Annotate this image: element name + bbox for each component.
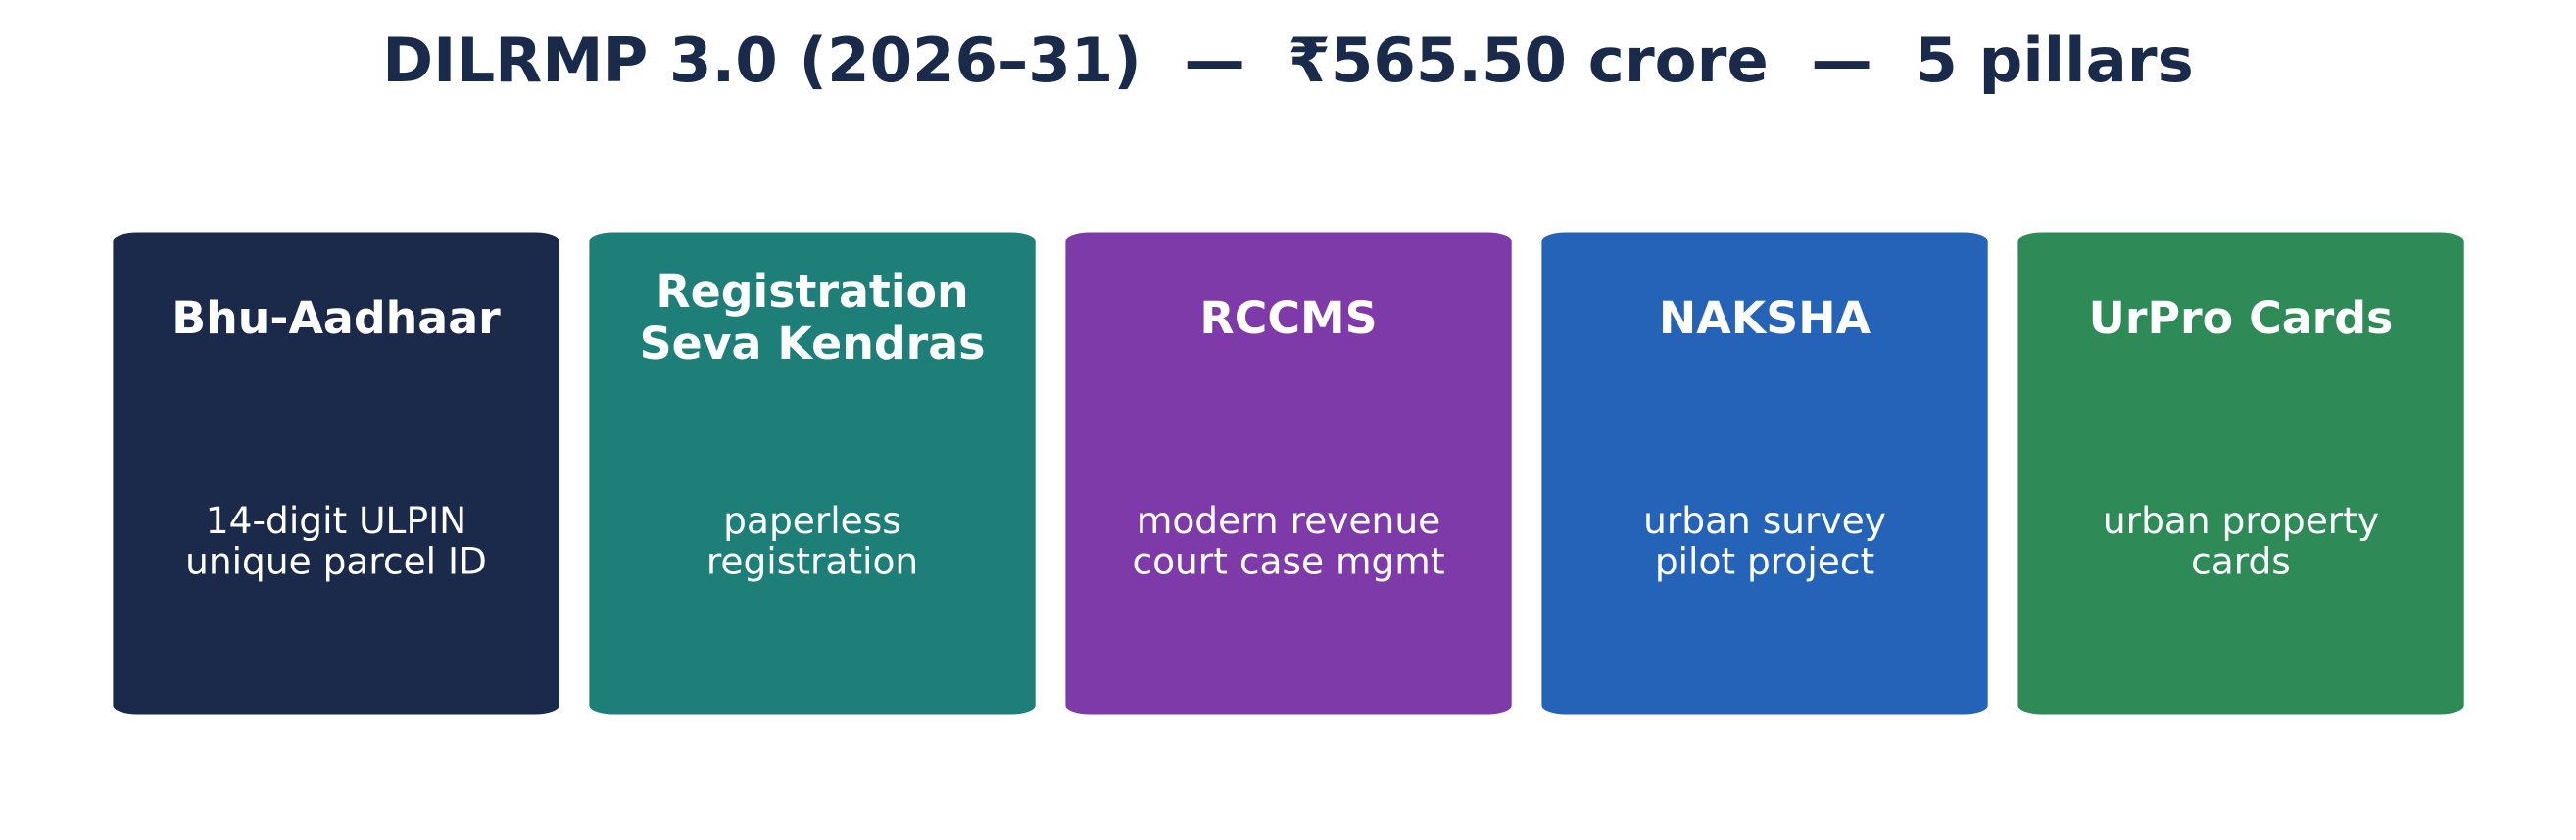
description: Bhu-Aadhaar: 14-digit ULPIN (206, 499, 466, 542)
panel: Bhu-Aadhaar (113, 233, 559, 714)
heading: UrPro Cards: UrPro Cards (2089, 291, 2393, 344)
description: RCCMS: court case mgmt (1132, 539, 1445, 582)
heading: RCCMS: RCCMS (1199, 291, 1378, 344)
description: NAKSHA: urban survey (1643, 499, 1886, 542)
heading: Bhu-Aadhaar: Bhu-Aadhaar (171, 291, 501, 344)
description: UrPro Cards: urban property (2103, 499, 2379, 542)
description: UrPro Cards: cards (2191, 539, 2291, 582)
description: Registration Seva Kendras: registration (706, 539, 918, 582)
description: NAKSHA: pilot project (1655, 539, 1874, 582)
panel: Registration Seva Kendras (589, 233, 1036, 714)
description: RCCMS: modern revenue (1137, 499, 1440, 542)
heading: Registration Seva Kendras: Registration (656, 265, 969, 318)
panel: UrPro Cards (2017, 233, 2464, 714)
description: Bhu-Aadhaar: unique parcel ID (185, 539, 487, 582)
description: Registration Seva Kendras: paperless (723, 499, 901, 542)
heading: NAKSHA: NAKSHA (1659, 291, 1871, 344)
heading: Registration Seva Kendras: Seva Kendras (640, 317, 985, 370)
title: DILRMP 3.0 (2026–31) — ₹565.50 crore — 5 pillars (382, 25, 2194, 96)
panel: NAKSHA (1541, 233, 1988, 714)
panel: RCCMS (1065, 233, 1512, 714)
